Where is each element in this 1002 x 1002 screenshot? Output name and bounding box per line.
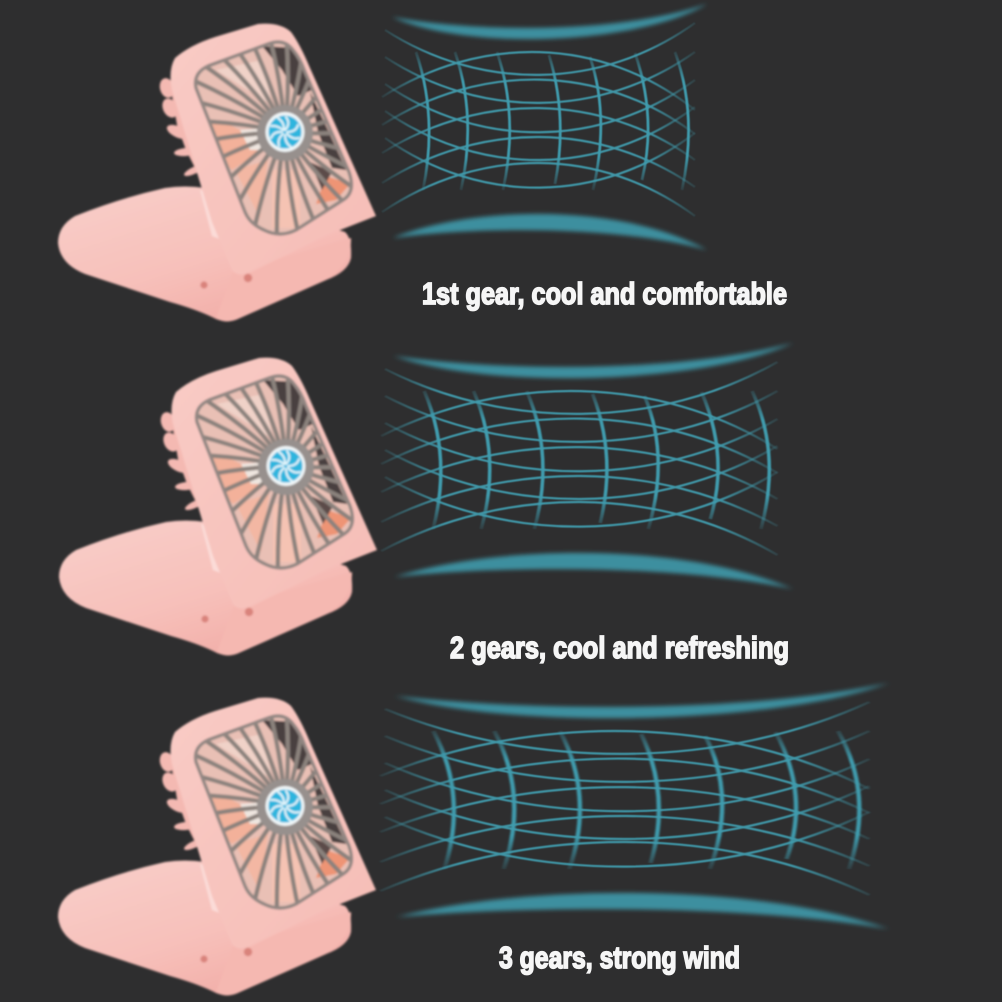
spokes <box>143 0 427 274</box>
wind mesh cross lines <box>416 52 689 190</box>
fan: first gear <box>58 0 427 322</box>
blades and dark gaps <box>143 0 427 274</box>
caption: third gear: 3 gears, strong wind <box>499 940 740 975</box>
fan body <box>171 24 376 275</box>
base lower edge shade <box>216 238 351 322</box>
fan: second gear <box>59 324 428 656</box>
rear fins <box>158 62 225 200</box>
caption: first gear: 1st gear, cool and comfortable <box>422 276 787 311</box>
wind graphic: first gear <box>382 4 707 250</box>
grille rim <box>196 42 351 234</box>
base holes <box>200 274 252 289</box>
grille interior <box>196 42 351 234</box>
wind graphic: third gear <box>380 683 888 929</box>
hub <box>257 105 313 161</box>
hub swirl <box>271 117 299 147</box>
base housing <box>58 186 351 321</box>
wind mesh curves <box>382 23 695 216</box>
fan: third gear <box>58 664 427 996</box>
wind graphic: second gear <box>381 343 793 589</box>
caption: second gear: 2 gears, cool and refreshing <box>450 630 789 665</box>
hinge fins <box>200 190 222 240</box>
wind arcs <box>392 4 707 250</box>
